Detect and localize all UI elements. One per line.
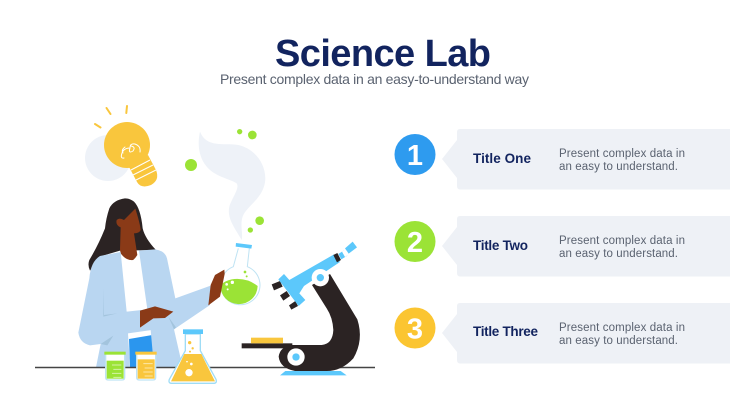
trousers panel [129, 335, 154, 367]
number badge [394, 221, 436, 262]
card title: Title Three [473, 324, 538, 339]
green beaker [104, 352, 126, 380]
smoke and green bubbles [185, 129, 265, 240]
slide [251, 338, 283, 343]
microscope base [280, 371, 347, 375]
bench line [35, 366, 375, 368]
card description: an easy to understand. [559, 248, 678, 260]
hair [88, 198, 156, 271]
panel: item one [394, 129, 730, 190]
panel: item one: 1 [407, 140, 423, 172]
objectives [272, 281, 298, 310]
scientist [78, 198, 211, 367]
yellow beaker [135, 352, 157, 380]
microscope arm [279, 274, 360, 371]
card [442, 303, 730, 364]
subtitle: Present complex data in an easy-to-understand way [220, 71, 529, 87]
card description [559, 322, 685, 347]
card description: Present complex data in [559, 322, 685, 334]
panel: item two [394, 216, 730, 276]
panel: item three [394, 303, 730, 364]
number badge [394, 308, 436, 348]
icon: light bulb [85, 106, 157, 186]
panel: item two: 2 [407, 227, 423, 259]
card description [559, 148, 685, 173]
green round flask [208, 243, 260, 305]
hand [140, 306, 173, 328]
card [442, 129, 730, 190]
lower wheel [287, 348, 305, 366]
card title: Title One [473, 151, 531, 166]
card description [559, 235, 685, 260]
shirt [121, 253, 153, 339]
card description: an easy to understand. [559, 161, 678, 173]
lab coat [78, 252, 152, 367]
coat shadow [101, 288, 176, 345]
neck and face [116, 209, 141, 262]
hand holding flask [208, 270, 225, 305]
card title: Title Two [473, 238, 528, 253]
microscope tube [278, 254, 340, 306]
card description: Present complex data in [559, 148, 685, 160]
number badge [394, 134, 436, 175]
microscope stage [242, 343, 292, 348]
conical yellow flask [169, 329, 216, 383]
card description: an easy to understand. [559, 335, 678, 347]
title: Science Lab [275, 33, 491, 75]
microscope [242, 242, 360, 375]
upper wheel [312, 269, 329, 286]
panel: item three: 3 [407, 314, 423, 346]
card [442, 216, 730, 276]
card description: Present complex data in [559, 235, 685, 247]
